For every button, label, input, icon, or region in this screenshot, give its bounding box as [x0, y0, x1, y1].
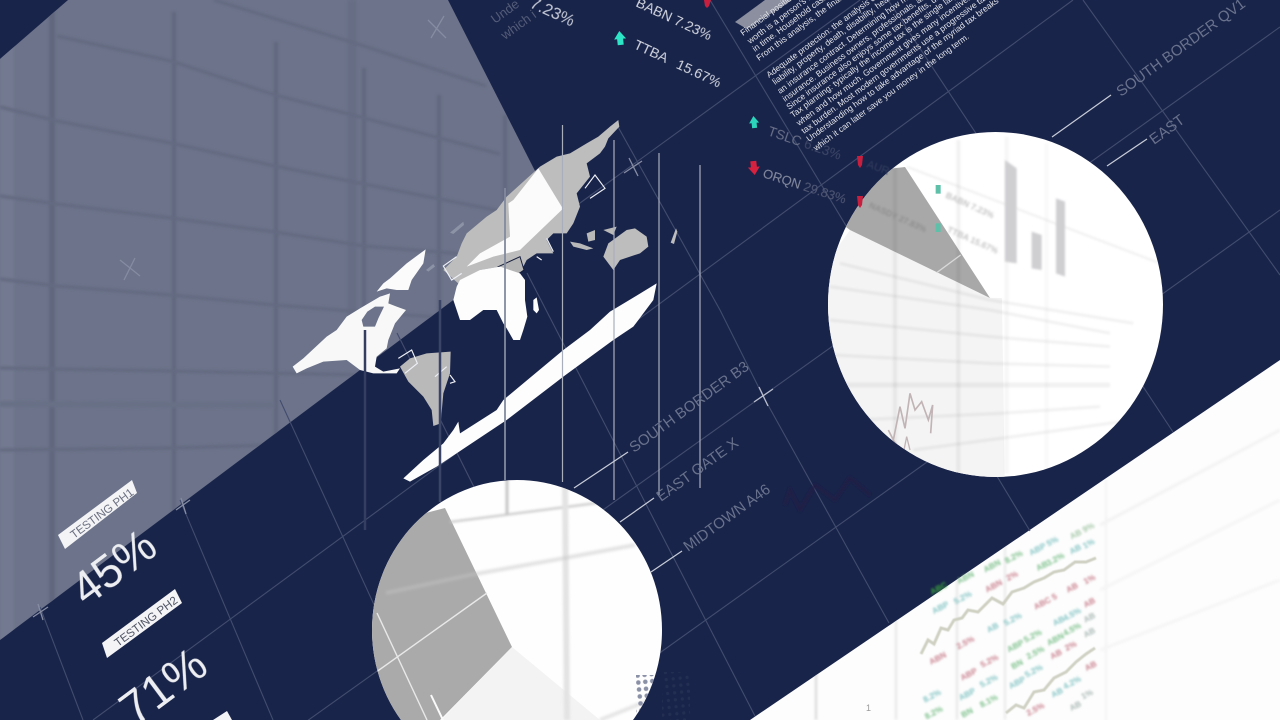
- green rows: ABP: [1005, 637, 1026, 654]
- green rows: BN: [959, 705, 975, 720]
- pie sector: grey: [360, 508, 512, 720]
- teal rows: AB: [1082, 610, 1097, 625]
- green rows: 5.2%: [1022, 627, 1044, 645]
- icon: teal up arrow small: [748, 116, 760, 128]
- location label: East: EAST: [1146, 111, 1188, 148]
- continent: Arabia: [498, 257, 524, 275]
- teal rows: 4.2%: [1061, 673, 1083, 691]
- line chart: [888, 393, 933, 440]
- teal rows: ABP: [1007, 674, 1027, 691]
- red rows: AB: [1048, 647, 1064, 661]
- faded paragraph fragment: which i: [497, 7, 539, 43]
- teal rows: 8.2%: [921, 687, 943, 705]
- stat: testing phase 2: TESTING PH2: [113, 595, 180, 649]
- red rows: ABP: [958, 665, 979, 683]
- green rows: AB: [1034, 558, 1050, 573]
- Hudson Bay: [362, 307, 384, 327]
- teal rows: 5.2%: [1023, 662, 1045, 680]
- continent: Africa: [453, 267, 527, 340]
- pie sector: light: [828, 230, 1005, 477]
- faded tickers: BABN 7.23%: [944, 190, 996, 220]
- location label: South Border B3: SOUTH BORDER B3: [626, 358, 752, 456]
- green rows: 8.1%: [978, 692, 1000, 710]
- green rows: BN: [1009, 657, 1025, 671]
- stat: testing phase 2: [102, 589, 216, 720]
- faded tickers: TTBA 15.67%: [946, 224, 1000, 256]
- ticker: TTBA: TTBA 15.67%: [632, 36, 724, 91]
- pie chart: right: [828, 132, 1163, 477]
- pie chart: left: [360, 478, 690, 720]
- inner tick line: [937, 255, 961, 273]
- teal rows: 1%: [1081, 536, 1097, 551]
- bar chart: [1005, 160, 1065, 277]
- continent: South America: [400, 352, 451, 426]
- sparkline: upper ticker: [921, 558, 1096, 654]
- teal markers: [936, 185, 941, 232]
- icon: red markers: [704, 0, 863, 208]
- ticker: ORQN: ORQN 29.83%: [761, 166, 849, 207]
- ticker: TSLC: TSLC 6.23%: [766, 124, 843, 163]
- dot pattern: [636, 675, 654, 713]
- teal rows: AB: [1068, 542, 1083, 556]
- green rows: 8.2%: [1003, 548, 1025, 566]
- vertical scale lines: [365, 125, 700, 530]
- green rows: ABN: [955, 569, 976, 586]
- continent: North America: [293, 293, 406, 373]
- green rows: 3.2%: [1045, 550, 1067, 568]
- teal rows: ABP 5%: [1027, 534, 1060, 558]
- stat: testing phase 1: 45%: [61, 518, 166, 615]
- location label: East: [1107, 111, 1188, 166]
- red rows: 2.5%: [955, 633, 977, 651]
- page number: 1: [866, 703, 871, 713]
- heading tag: [735, 0, 792, 29]
- red rows: 1%: [1082, 571, 1097, 586]
- teal rows: ABP: [957, 685, 977, 703]
- sparkline: lower ticker: [1006, 648, 1095, 713]
- green rows: ABN: [982, 557, 1002, 574]
- continent: Greenland: [377, 249, 426, 292]
- red rows: [927, 568, 1098, 718]
- red rows: ABN: [983, 577, 1004, 594]
- islands: Iceland and Britain: [426, 222, 464, 272]
- red rows: AB: [1064, 580, 1080, 595]
- icon: teal up arrow: [613, 30, 627, 46]
- red rows: 2%: [1063, 638, 1079, 653]
- teal rows: AB 9%: [1068, 520, 1096, 541]
- red rows: AB: [1082, 595, 1097, 610]
- stat: testing phase 1: [58, 480, 166, 615]
- faint red chart ghost: [785, 478, 870, 510]
- crosshair markers: [33, 16, 773, 620]
- teal rows: 1%: [1079, 686, 1095, 701]
- teal rows: AB: [1051, 613, 1066, 628]
- teal rows: AB: [1082, 625, 1097, 640]
- island: New Zealand: [671, 228, 677, 244]
- red rows: 2%: [1004, 568, 1020, 583]
- stat: testing phase 3 tag: [213, 711, 232, 720]
- faded ticker behind right pie: AUR: [865, 159, 891, 178]
- faded tickers: [868, 190, 1000, 256]
- icon: red down arrow: [747, 160, 761, 176]
- teal rows: AB: [985, 620, 1000, 635]
- islands: Indonesia: [570, 227, 617, 250]
- text block: financial planning notes: [735, 0, 1000, 153]
- text block: financial planning notes: which it can later save you money in the long term.: [810, 31, 971, 153]
- ticker table: [921, 520, 1098, 720]
- pie sector: light: [441, 647, 600, 720]
- green rows: 4.5%: [1061, 620, 1083, 638]
- location label: South Border B3: [574, 358, 752, 488]
- teal rows: 4.5%: [1061, 605, 1083, 623]
- region brackets: [398, 175, 605, 383]
- red rows: 2.5%: [1025, 700, 1047, 718]
- location label: East Gate X: EAST GATE X: [653, 434, 742, 505]
- continent: Australia: [603, 228, 648, 270]
- faded paragraph fragment: [488, 0, 539, 43]
- red rows: ABN: [927, 649, 948, 667]
- island: Madagascar: [533, 297, 539, 313]
- location label: Midtown A46: [651, 481, 774, 572]
- location label: Midtown A46: MIDTOWN A46: [680, 481, 774, 555]
- panel: grey window overlay: [0, 0, 560, 640]
- faded tickers: NASDY 27.83%: [868, 200, 928, 234]
- teal rows: 5.2%: [952, 588, 974, 606]
- red rows: 5.2%: [979, 652, 1001, 670]
- teal rows: 5.2%: [978, 672, 1000, 690]
- pie sector: grey: [830, 167, 990, 298]
- green rows: ABC: [928, 579, 949, 597]
- location label: East Gate X: [620, 434, 742, 522]
- continent: Eurasia: [443, 120, 619, 285]
- red rows: ABC 5: [1032, 591, 1059, 612]
- teal rows: AB: [1049, 685, 1065, 700]
- red rows: AB: [1083, 658, 1098, 673]
- teal rows: AB: [1068, 698, 1083, 713]
- world map: [293, 120, 677, 482]
- teal rows: ABP: [930, 599, 951, 616]
- green rows: 2.5%: [1025, 643, 1047, 661]
- location label: South Border QV: [1052, 0, 1249, 137]
- teal rows: [921, 520, 1097, 713]
- teal rows: 5.2%: [1002, 610, 1024, 628]
- green rows: ABN: [1045, 630, 1066, 648]
- green rows: [923, 548, 1083, 720]
- white band across Asia: [467, 168, 563, 267]
- continent: Antarctica: [403, 283, 657, 482]
- window grid reflection: [830, 137, 1160, 473]
- panel: white data table: [750, 360, 1280, 720]
- dot pattern on navy: [662, 672, 690, 720]
- stat: testing phase 1: TESTING PH1: [69, 487, 136, 541]
